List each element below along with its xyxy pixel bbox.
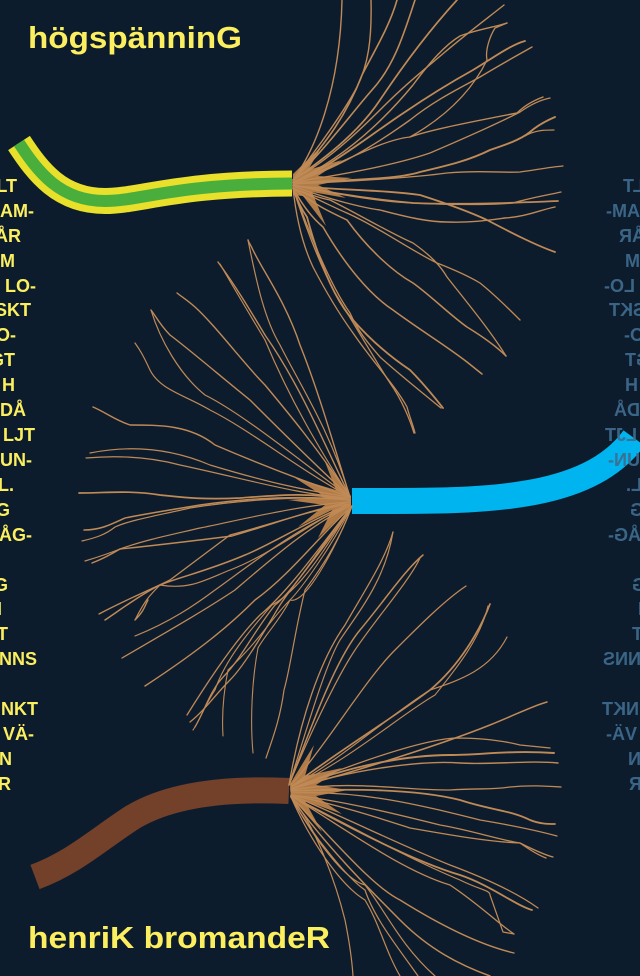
left text column [0, 176, 38, 794]
right mirrored text column: LO- [604, 276, 635, 296]
copper strands: bottom fan [289, 532, 561, 976]
left text column: VÄ- [3, 724, 34, 744]
wire: brown [35, 790, 289, 877]
right mirrored text column: M [625, 251, 640, 271]
left text column: AM- [0, 201, 34, 221]
left text column: M [0, 251, 15, 271]
left text column: NKT [1, 699, 38, 719]
right mirrored text column: VÄ- [606, 724, 637, 744]
left text column: DÅ [0, 400, 26, 420]
left text column: H [2, 375, 15, 395]
left text column: UN- [0, 450, 32, 470]
right mirrored text column: AM- [606, 201, 640, 221]
author: henriK bromandeR [28, 920, 330, 955]
right mirrored text column: H [625, 375, 638, 395]
title: högspänninG [28, 20, 242, 55]
left text column: NNS [0, 649, 37, 669]
copper strands: middle fan [79, 240, 352, 758]
right mirrored text column: NNS [603, 649, 640, 669]
left text column: LJT [3, 425, 35, 445]
copper strands: top fan [293, 0, 563, 433]
right mirrored text column: LJT [605, 425, 637, 445]
right mirrored text column: DÅ [614, 400, 640, 420]
right mirrored text column [602, 176, 640, 794]
left text column: LO- [5, 276, 36, 296]
wire: green and yellow striped [19, 143, 292, 201]
wire: blue [352, 438, 634, 501]
right mirrored text column: NKT [602, 699, 639, 719]
right mirrored text column: UN- [608, 450, 640, 470]
